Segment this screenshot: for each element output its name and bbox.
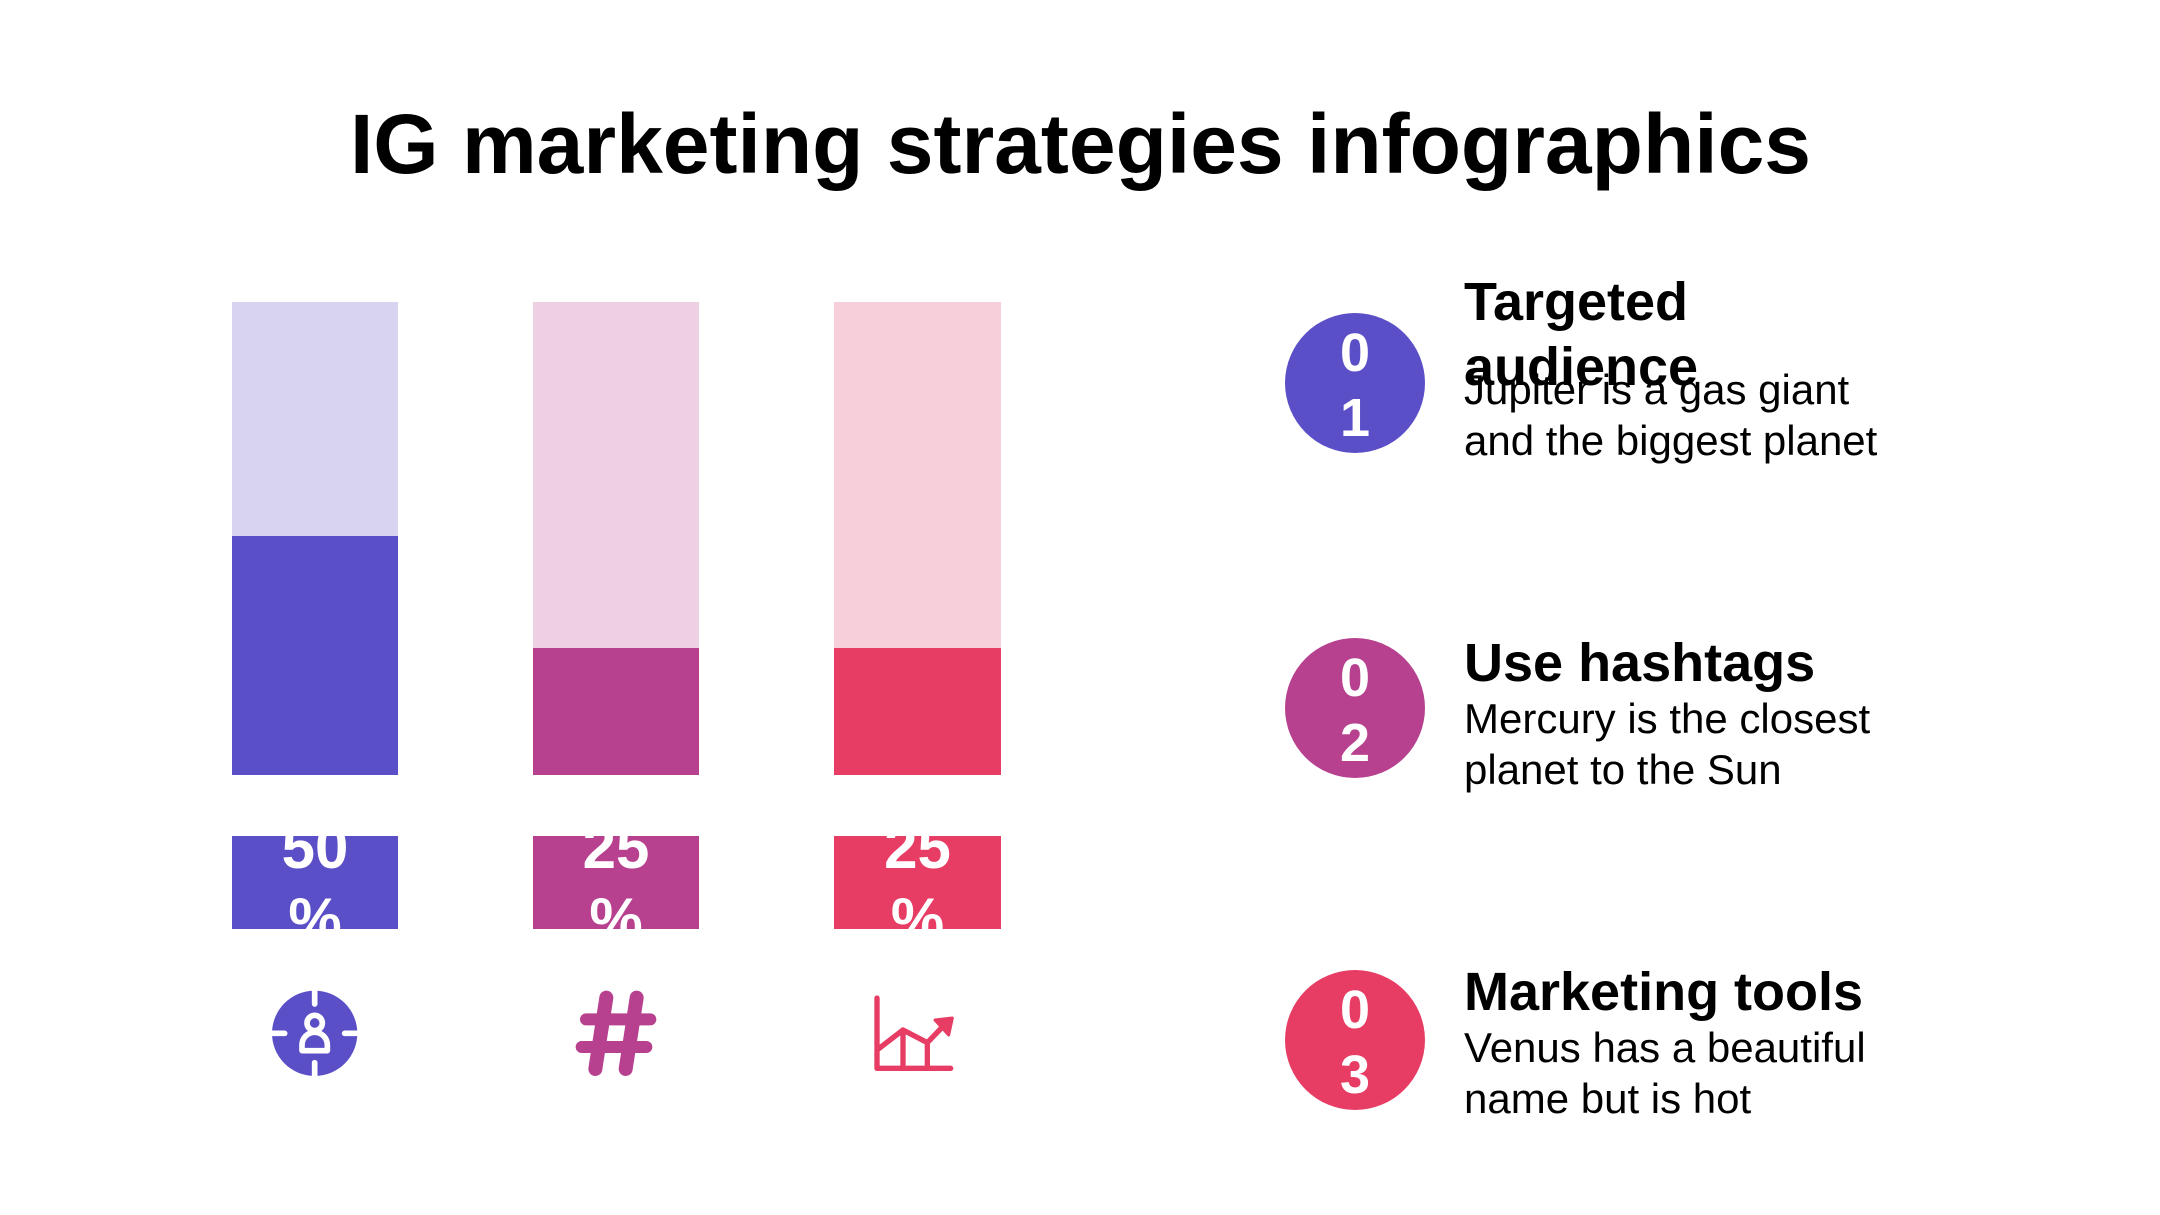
number circle 01: 0 — [1340, 323, 1370, 383]
number circle 02: 2 — [1340, 713, 1370, 773]
icon: hashtag — [576, 990, 656, 1076]
icon: target audience — [272, 990, 358, 1076]
bar 1 fill — [232, 536, 398, 775]
number circle 03: 0 — [1340, 980, 1370, 1040]
description — [1464, 366, 1877, 464]
description — [1464, 695, 1870, 793]
description: Jupiter is a gas giant — [1464, 366, 1849, 413]
number circle 01: 1 — [1340, 388, 1370, 448]
item 3 — [1285, 962, 1866, 1122]
bar 3 track — [834, 302, 1001, 775]
item 1 — [1285, 272, 1877, 464]
percent label 50% — [232, 836, 398, 929]
heading: audience — [1464, 337, 1698, 397]
percent label 25% — [533, 836, 699, 929]
heading: Marketing tools — [1464, 962, 1863, 1022]
number circle 01 — [1285, 313, 1425, 453]
heading: Targeted — [1464, 272, 1688, 332]
number circle 02: 0 — [1340, 648, 1370, 708]
percent label 25% — [834, 836, 1001, 929]
bar 1 track — [232, 302, 398, 775]
item 2 — [1285, 633, 1870, 793]
description — [1464, 1024, 1866, 1122]
description: and the biggest planet — [1464, 417, 1877, 464]
heading: Use hashtags — [1464, 633, 1815, 693]
description: Venus has a beautiful — [1464, 1024, 1866, 1071]
title: IG marketing strategies infographics — [350, 97, 1811, 191]
heading — [1464, 272, 1698, 397]
description: planet to the Sun — [1464, 746, 1782, 793]
bar 2 track — [533, 302, 699, 775]
number circle 03: 3 — [1340, 1045, 1370, 1105]
number circle 02 — [1285, 638, 1425, 778]
icon: growth chart — [874, 995, 954, 1071]
description: name but is hot — [1464, 1075, 1751, 1122]
number circle 03 — [1285, 970, 1425, 1110]
description: Mercury is the closest — [1464, 695, 1870, 742]
bar 2 fill — [533, 648, 699, 775]
bar 3 fill — [834, 648, 1001, 775]
